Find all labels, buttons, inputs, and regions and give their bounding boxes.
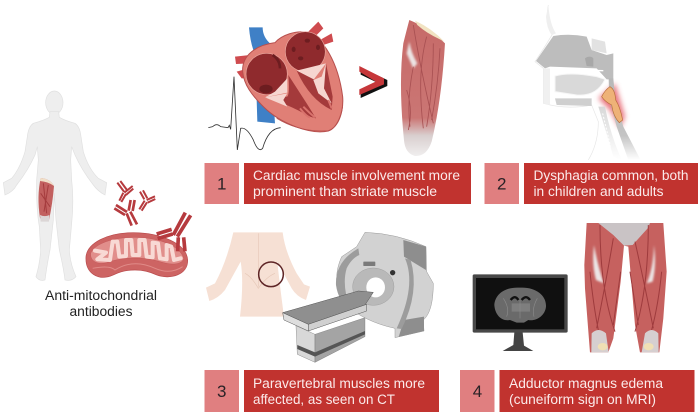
number box 1: 1 <box>217 174 226 194</box>
callout 4 <box>460 370 694 412</box>
icon: monitor with brain scan <box>473 274 568 351</box>
icon: inflamed pharynx glow <box>598 83 625 128</box>
panel: head and neck sagittal section <box>535 5 641 160</box>
text box 4: Adductor magnus edema <box>509 376 664 391</box>
icon: heart cross-section <box>243 32 343 132</box>
number box 1 <box>204 163 239 204</box>
text box 3: affected, as seen on CT <box>253 392 395 407</box>
icon: ECG trace <box>208 77 281 150</box>
text box 2 <box>524 163 698 204</box>
text box 2: in children and adults <box>534 184 664 199</box>
text box 1: Cardiac muscle involvement more <box>253 168 460 183</box>
icon: pharyngeal mass <box>602 87 623 123</box>
number box 3 <box>204 370 239 412</box>
text box 3: Paravertebral muscles more <box>253 376 425 391</box>
text box 1: prominent than striate muscle <box>253 184 437 199</box>
icon: anterior thigh muscles <box>584 223 667 352</box>
icon: antibodies <box>114 181 191 251</box>
number box 2 <box>484 163 519 204</box>
text box 4 <box>500 370 694 412</box>
icon: head silhouette <box>535 5 641 160</box>
text box 2: Dysphagia common, both <box>534 168 688 183</box>
icon: back of torso <box>206 232 310 317</box>
icon: highlight circle <box>259 262 283 287</box>
panel: cardiac vs striate muscle <box>208 20 445 156</box>
icon: greater-than sign <box>359 66 387 98</box>
panel: MRI monitor and thigh muscles <box>473 223 667 352</box>
icon: blood vessels behind heart <box>235 22 333 123</box>
icon: scanner table <box>283 291 373 362</box>
callout 1 <box>204 163 471 204</box>
panel: human figure with mitochondrion <box>3 91 191 319</box>
number box 3: 3 <box>217 382 226 401</box>
callout 3 <box>204 370 439 412</box>
text box 3 <box>244 370 439 412</box>
label: anti-mitochondrial antibodies: antibodies <box>70 304 133 319</box>
text box 1 <box>244 163 471 204</box>
panel: back and CT scanner <box>206 232 433 362</box>
icon: mitochondrion <box>86 233 188 277</box>
label: anti-mitochondrial antibodies: Anti-mitochondrial <box>45 288 157 303</box>
icon: CT scanner <box>336 232 433 338</box>
icon: human body with affected thigh <box>3 91 107 280</box>
icon: thigh muscle <box>401 20 445 156</box>
number box 4: 4 <box>473 382 482 401</box>
text box 4: (cuneiform sign on MRI) <box>509 392 656 407</box>
callout 2 <box>484 163 698 204</box>
number box 4 <box>460 370 494 412</box>
number box 2: 2 <box>497 174 506 194</box>
